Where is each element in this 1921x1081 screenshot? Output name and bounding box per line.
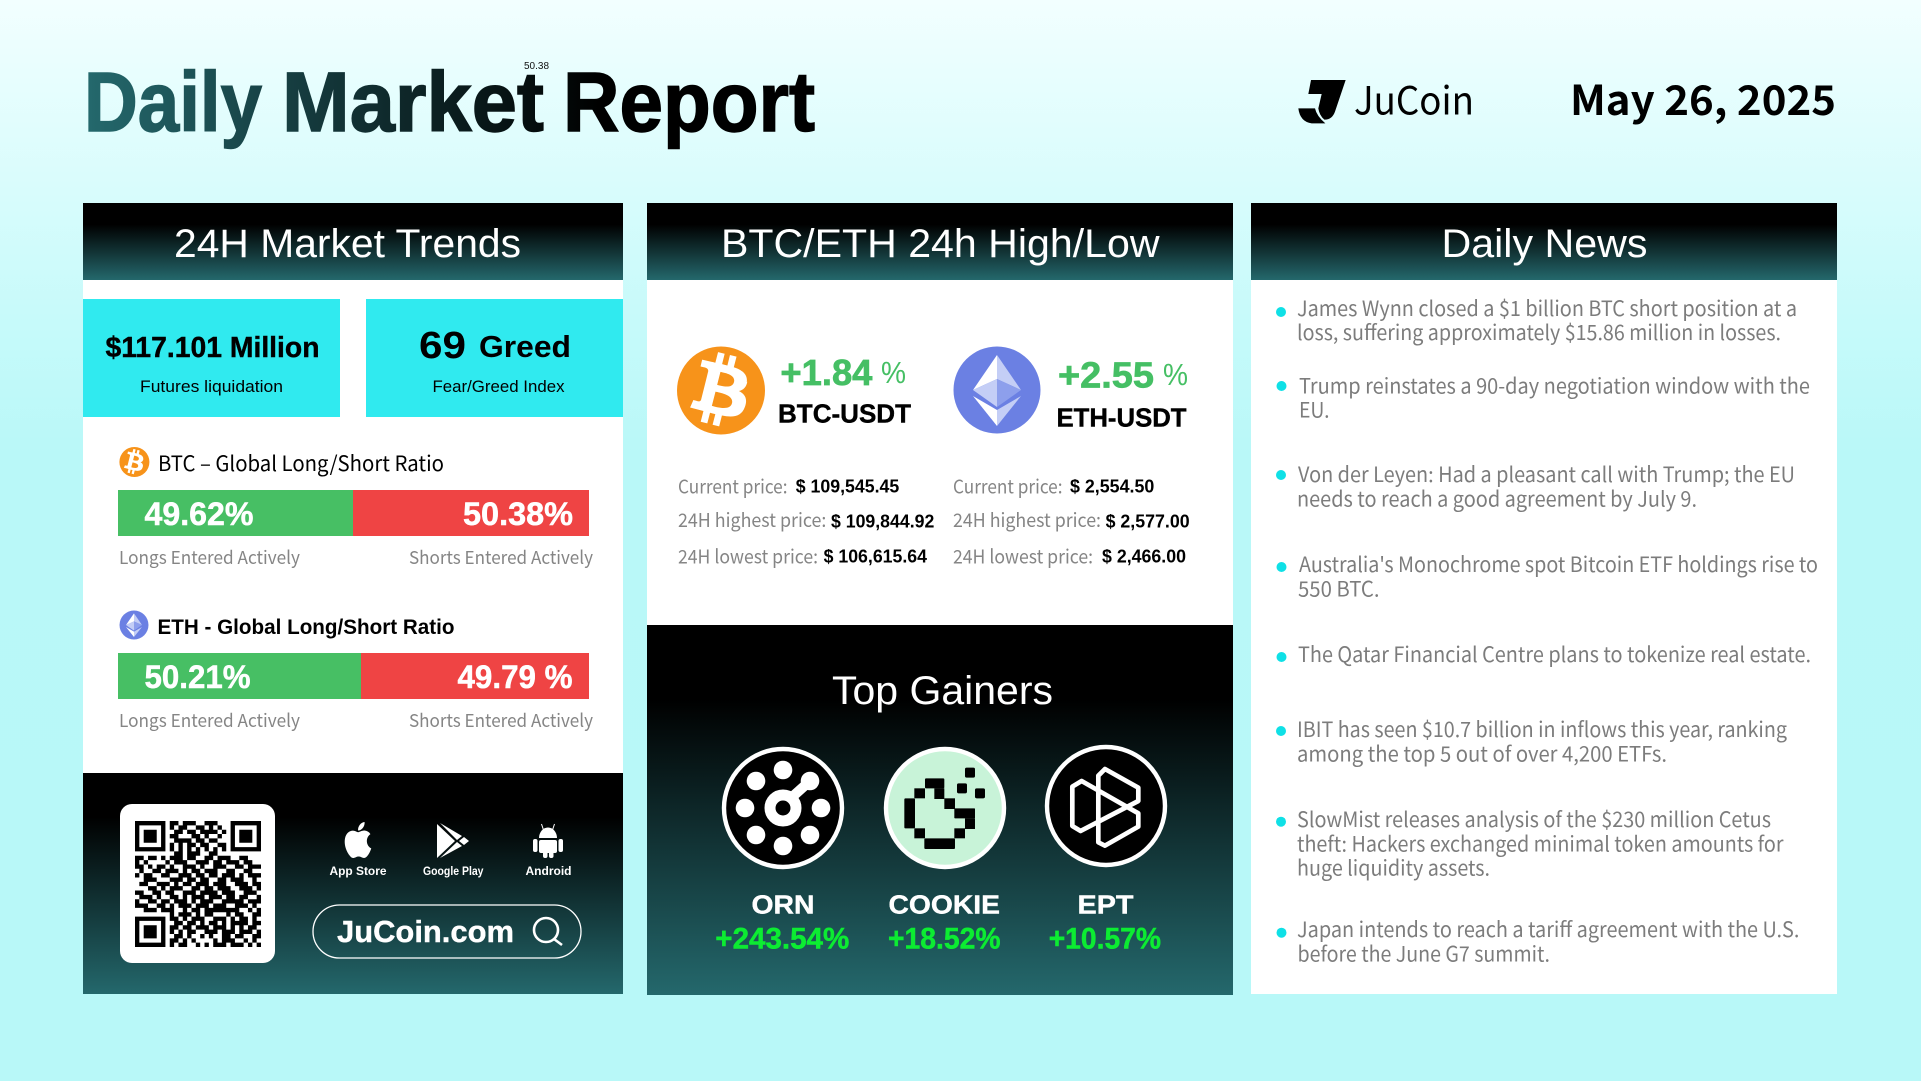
news item 2: Trump reinstates a 90-day negotiation window with the [1299,370,1810,400]
ETH short bar [361,653,589,699]
icon: Android [533,824,563,858]
news item 5: The Qatar Financial Centre plans to tokenize real estate. [1298,639,1811,669]
BTC short percent: 50.38% [463,496,573,532]
title: Daily [84,55,262,149]
ETH price table: 24H highest price: [953,506,1101,533]
news item 1: loss, suffering approximately $15.86 million in losses. [1297,317,1781,347]
news item 2 [1276,370,1810,424]
BTC ratio heading: BTC – Global Long/Short Ratio [158,448,444,478]
icon: search [534,918,562,945]
ETH price table [953,472,1190,570]
panel heading: Daily News [1442,222,1648,266]
panel body [83,203,623,994]
panel: BTC/ETH 24h High/Low [647,203,1233,995]
news item 6: among the top 5 out of over 4,200 ETFs. [1297,739,1667,769]
EPT gain: +10.57% [1049,922,1161,955]
App Store label: App Store [330,864,387,878]
ETH long percent: 50.21% [144,659,250,695]
panel header bar [83,203,623,280]
BTC price table: $ 109,545.45 [796,477,899,497]
news item 8: Japan intends to reach a tariff agreement with the U.S. [1297,914,1799,944]
ETH price table: $ 2,554.50 [1070,477,1154,497]
BTC long bar [118,490,353,536]
icon: ORN [724,749,842,867]
title [84,55,815,149]
COOKIE gain: +18.52% [888,922,1000,955]
news item 3 [1276,459,1795,514]
title: Market [282,55,544,149]
ETH price table: 24H lowest price: [953,542,1093,570]
BTC price table: 24H lowest price: [678,542,818,570]
ETH percent sign: % [1163,357,1188,392]
ETH long bar [118,653,361,699]
stat card: fear and greed index: Greed [479,329,571,364]
panel body [1251,203,1837,994]
news item 4 [1276,549,1818,604]
news item 8 [1276,914,1799,969]
stat card: futures liquidation: Futures liquidation [140,377,283,396]
icon: ethereum [954,346,1040,434]
ETH short percent: 49.79 % [458,659,572,695]
panel: top gainers [647,625,1233,995]
stat card: fear and greed index: 69 [419,325,466,367]
ETH price table: $ 2,577.00 [1106,511,1190,531]
icon: Google Play [437,823,469,858]
ETH change: +2.55 [1058,355,1154,396]
ORN gain: +243.54% [715,922,849,955]
BTC price table: $ 109,844.92 [831,511,934,531]
Android label: Android [526,864,572,878]
icon: App Store [345,822,371,858]
BTC price table [678,472,934,570]
news item 1 [1276,293,1797,347]
report date: May 26, 2025 [1570,67,1836,127]
BTC short bar [353,490,589,536]
BTC long label: Longs Entered Actively [119,544,301,570]
ETH pair name: ETH-USDT [1056,403,1187,433]
title: Report [563,55,815,149]
BTC percent sign: % [881,355,906,390]
icon: COOKIE [886,749,1004,867]
icon: EPT [1047,747,1165,865]
footer download strip [83,773,623,994]
stat card: futures liquidation: $117.101 Million [106,332,320,364]
JuCoin logo [1298,70,1474,126]
BTC price table: $ 106,615.64 [824,547,927,567]
panel: Daily News [1251,203,1837,994]
logo wordmark: JuCoin [1354,70,1474,126]
news item 3: needs to reach a good agreement by July 9. [1297,484,1697,514]
COOKIE label: COOKIE [888,889,1000,919]
website text: JuCoin.com [337,914,514,949]
ETH long label: Longs Entered Actively [119,707,301,733]
BTC price table: 24H highest price: [678,506,826,533]
news item 7: huge liquidity assets. [1297,853,1490,883]
Google Play label: Google Play [423,866,484,878]
icon: JuCoin mark [1298,80,1346,123]
BTC pair name: BTC-USDT [778,398,911,428]
BTC long percent: 49.62% [144,496,254,532]
ETH ratio block [118,611,594,733]
stat card: fear and greed index [366,299,623,417]
EPT label: EPT [1078,889,1134,919]
BTC change: +1.84 [780,352,872,393]
news item 6 [1276,714,1787,769]
panel header bar [1251,203,1837,280]
news item 7 [1276,804,1784,883]
panel heading: 24H Market Trends [174,222,521,266]
icon: bitcoin [677,346,765,434]
news item 4: 550 BTC. [1298,574,1380,604]
top gainers heading: Top Gainers [832,669,1053,713]
icon: ethereum small [120,611,148,639]
ORN label: ORN [752,889,814,919]
icon: bitcoin small [119,447,149,477]
news item 4: Australia's Monochrome spot Bitcoin ETF holdings rise to [1299,549,1818,579]
news item 2: EU. [1299,394,1330,424]
BTC short label: Shorts Entered Actively [409,544,594,570]
news item 1: James Wynn closed a $1 billion BTC short position at a [1297,293,1797,323]
ETH price table: Current price: [953,472,1062,500]
panel heading: BTC/ETH 24h High/Low [721,222,1160,266]
news item 3: Von der Leyen: Had a pleasant call with Trump; the EU [1298,459,1795,489]
news item 6: IBIT has seen $10.7 billion in inflows this year, ranking [1297,714,1787,744]
ETH short label: Shorts Entered Actively [409,707,594,733]
stat card: futures liquidation [83,299,340,417]
panel header bar [647,203,1233,280]
ETH price table: $ 2,466.00 [1102,547,1186,567]
QR code card [120,804,275,963]
news item 7: SlowMist releases analysis of the $230 million Cetus [1297,804,1771,834]
QR code modules [135,823,261,945]
website search pill [313,905,581,958]
small stray label: 50.38 [524,61,549,72]
news item 8: before the June G7 summit. [1298,939,1550,969]
stat card: fear and greed index: Fear/Greed Index [432,377,565,396]
panel: 24H Market Trends [83,203,623,994]
news item 7: theft: Hackers exchanged minimal token amounts for [1297,829,1784,859]
panel body [647,203,1233,625]
ETH ratio heading: ETH - Global Long/Short Ratio [158,616,454,639]
BTC price table: Current price: [678,472,788,500]
BTC ratio block [118,447,594,570]
